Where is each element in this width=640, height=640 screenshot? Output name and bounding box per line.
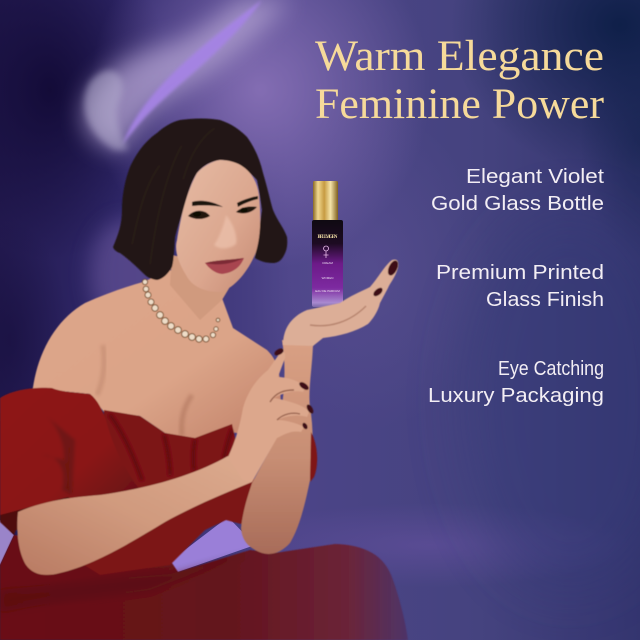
necklace (142, 279, 220, 342)
nose (214, 215, 236, 248)
puff sleeve (0, 388, 140, 516)
floor patch (165, 517, 255, 572)
lips (205, 258, 244, 274)
feature: premium printed glass finish (436, 261, 604, 311)
feature: premium printed glass finish: Premium Printed (436, 261, 604, 284)
left hand (228, 352, 309, 482)
feature: eye catching luxury packaging (428, 357, 604, 407)
hair (113, 118, 287, 280)
bodice (60, 410, 256, 575)
torso and shoulders (32, 270, 282, 440)
feature: elegant violet gold glass bottle: Elegant Violet (466, 165, 604, 188)
smoke wisps (84, 0, 290, 150)
palm shading (310, 306, 366, 326)
holding hand (283, 259, 400, 346)
hair highlights (132, 128, 215, 265)
model figure (0, 118, 408, 640)
right arm (241, 340, 313, 554)
title: Warm Elegance (315, 33, 604, 80)
sleeve shadow (42, 415, 75, 495)
bottle body (312, 220, 343, 307)
brows (192, 201, 223, 207)
feature: eye catching luxury packaging: Luxury Packaging (428, 384, 604, 407)
bodice folds (110, 415, 232, 480)
sleeve lower edge (0, 497, 75, 535)
neck (170, 255, 240, 320)
left floor patch (0, 520, 14, 565)
nail: second finger (372, 286, 384, 298)
face (176, 160, 260, 292)
shoulder crease (97, 345, 104, 395)
gold cap (313, 181, 338, 221)
feature: premium printed glass finish: Glass Finish (486, 288, 604, 311)
feature: eye catching luxury packaging: Eye Catching (498, 357, 604, 380)
finger creases (270, 390, 300, 420)
bottle emblem (324, 246, 329, 258)
nails lower hand (273, 347, 315, 430)
left forearm (17, 456, 252, 575)
dress fold shadow (0, 552, 250, 612)
perfume bottle: CREAM (322, 261, 333, 265)
title (315, 33, 604, 128)
skirt (0, 535, 408, 640)
cleavage shadow (182, 395, 192, 436)
feature: elegant violet gold glass bottle (431, 165, 604, 215)
title: Feminine Power (315, 81, 604, 128)
perfume bottle: WOMEN (322, 276, 333, 280)
eyes (188, 211, 210, 219)
bottle label: BELLVIGEN (318, 235, 338, 240)
sleeve strip behind arm (310, 432, 317, 482)
perfume bottle: EAU DE PARFUM (315, 289, 340, 293)
perfume bottle (312, 181, 343, 307)
nail: raised finger (386, 259, 400, 277)
feature: elegant violet gold glass bottle: Gold Glass Bottle (431, 192, 604, 215)
